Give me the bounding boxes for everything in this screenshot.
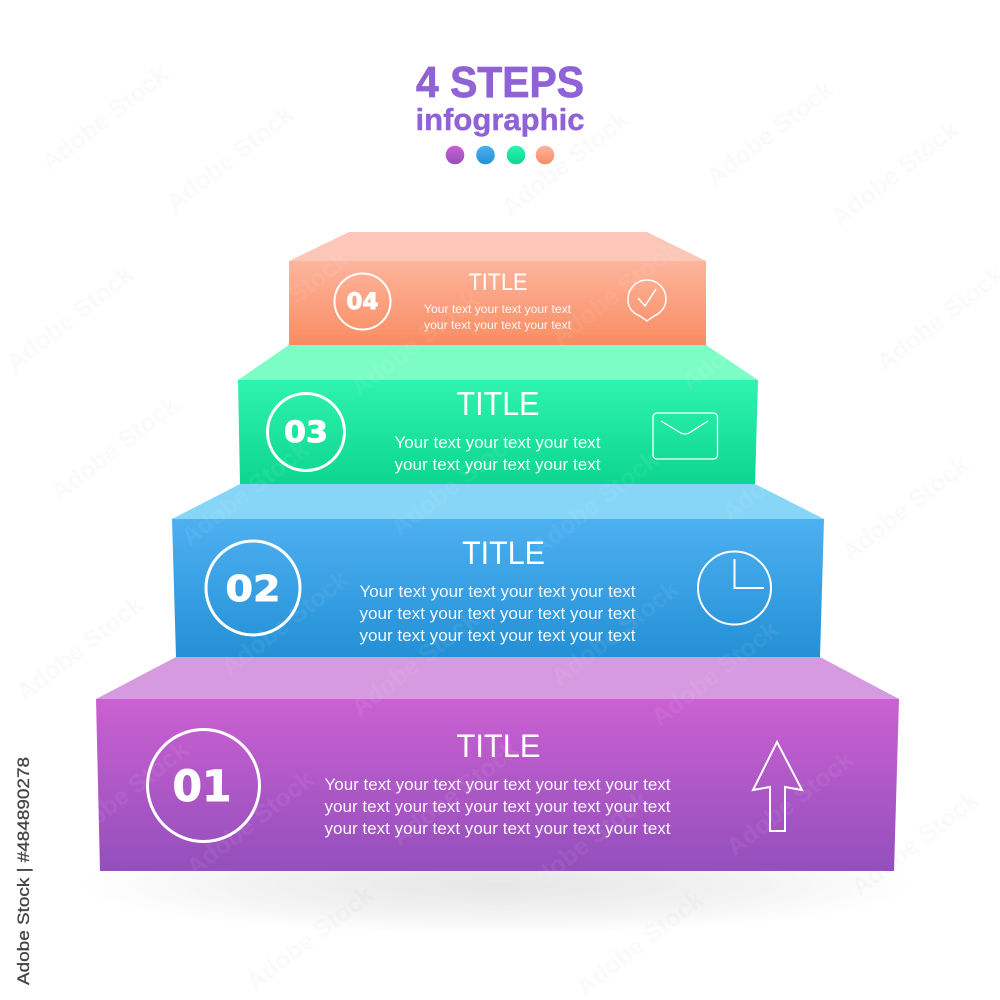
watermark over steps: Adobe Stock: [646, 616, 784, 732]
top face: [289, 232, 706, 261]
watermark over steps: Adobe Stock: [386, 426, 524, 542]
watermark over steps: Adobe Stock: [721, 746, 859, 862]
watermark over steps: Adobe Stock: [216, 246, 354, 362]
number badge 01: [148, 730, 260, 842]
body text: your text your text your text your text: [360, 605, 636, 623]
step 2: blue: [172, 484, 824, 657]
step 3: green: [238, 345, 758, 484]
stock id side label: Adobe Stock | #484890278: [14, 757, 33, 985]
watermark over steps: Adobe Stock: [386, 736, 524, 852]
number badge 04: 04: [346, 290, 378, 315]
watermark over steps: Adobe Stock: [346, 606, 484, 722]
step 1: purple: [96, 657, 899, 871]
title: TITLE: [468, 269, 528, 296]
watermark over steps: Adobe Stock: [176, 436, 314, 552]
title: TITLE: [456, 728, 540, 764]
icon: up arrow: [753, 742, 802, 831]
watermark over steps: Adobe Stock: [516, 786, 654, 902]
number badge 03: [268, 394, 344, 470]
body text: your text your text your text: [424, 318, 572, 332]
title: 4 STEPS: 4 STEPS: [416, 58, 584, 107]
front face: [96, 699, 899, 871]
top face: [172, 484, 824, 519]
colour dots: [446, 146, 554, 164]
watermark over steps: Adobe Stock: [181, 766, 319, 882]
front face: [238, 380, 758, 484]
watermark over steps: Adobe Stock: [546, 576, 684, 692]
step 4: orange: [289, 232, 706, 345]
watermark over steps: Adobe Stock: [676, 281, 814, 397]
front face: [289, 261, 706, 345]
body text: Your text your text your text: [424, 302, 572, 316]
watermark over steps: Adobe Stock: [546, 236, 684, 352]
number badge 04: [334, 274, 390, 330]
watermark over steps: Adobe Stock: [56, 736, 194, 852]
icon: envelope: [653, 413, 718, 459]
icon: speech check: [628, 280, 666, 321]
watermark over steps: Adobe Stock: [216, 566, 354, 682]
body text: your text your text your text your text: [360, 627, 636, 645]
number badge 03: 03: [284, 415, 328, 449]
top face: [238, 345, 758, 380]
number badge 01: 01: [172, 762, 232, 812]
body text: [424, 302, 572, 332]
body text: [360, 583, 636, 645]
body text: your text your text your text your text your text: [324, 798, 671, 816]
top face: [96, 657, 899, 699]
front face: [172, 519, 824, 657]
body text: your text your text your text: [394, 456, 601, 474]
number badge 02: 02: [226, 569, 280, 610]
body text: your text your text your text your text your text: [324, 820, 671, 838]
watermark over steps: Adobe Stock: [526, 446, 664, 562]
body text: [394, 434, 601, 474]
body text: [324, 776, 671, 838]
body text: Your text your text your text: [394, 434, 601, 452]
subtitle: infographic: infographic: [416, 102, 584, 137]
watermark over steps: Adobe Stock: [346, 286, 484, 402]
icon: clock: [698, 552, 771, 624]
ground shadow: [77, 835, 917, 935]
watermark over steps: Adobe Stock: [716, 411, 854, 527]
body text: Your text your text your text your text: [360, 583, 636, 601]
body text: Your text your text your text your text your text: [324, 776, 671, 794]
title: TITLE: [456, 385, 540, 422]
watermark over steps: [56, 236, 859, 902]
title: TITLE: [462, 535, 545, 571]
number badge 02: [206, 541, 300, 635]
